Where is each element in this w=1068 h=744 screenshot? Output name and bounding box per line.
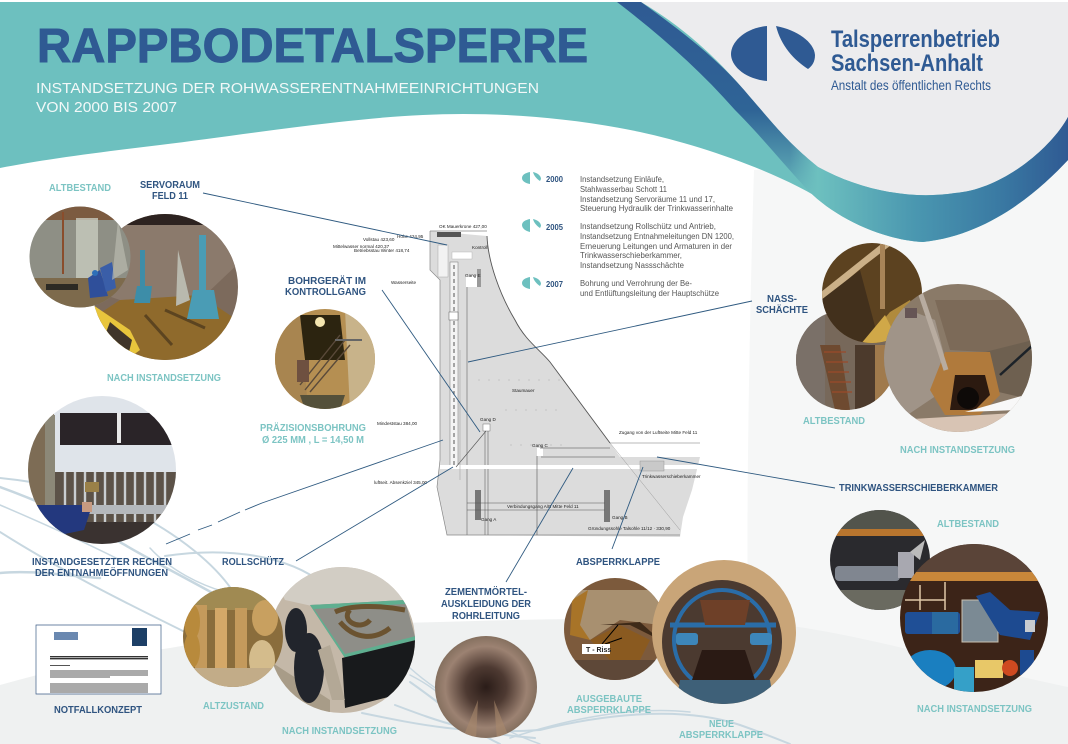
timeline 2005: Instandsetzung Rollschütz und Antrieb, bbox=[580, 222, 716, 231]
photo: Zementmörtel-Rohr bbox=[435, 636, 537, 740]
heading: Bohrgerät: BOHRGERÄT IM bbox=[288, 274, 366, 287]
timeline 2000: Steuerung Hydraulik der Trinkwasserinhalte bbox=[580, 204, 734, 213]
dam annotations: Zugang von der Luftseite Mitte Feld 11 bbox=[619, 430, 698, 435]
label: Präzisionsbohrung: PRÄZISIONSBOHRUNG bbox=[260, 421, 366, 434]
header: swoosh bbox=[617, 2, 1068, 242]
photo: neue Absperrklappe bbox=[650, 556, 798, 710]
photo: Rollschütz nach Instandsetzung bbox=[268, 564, 416, 716]
label: neue Absperrklappe: NEUE bbox=[709, 719, 734, 730]
timeline 2005: Trinkwasserschieberkammer, bbox=[580, 251, 682, 260]
label: ausgebaute Absperrklappe bbox=[567, 694, 651, 716]
logo: Anstalt des öffentlichen Rechts bbox=[831, 78, 991, 93]
dam annotations bbox=[333, 224, 701, 531]
dam annotations: Höhe 424,95 bbox=[397, 234, 424, 239]
dam annotations: Gründungssohle Talsohle 11/12 · 330,90 bbox=[588, 526, 671, 531]
heading: Nassschächte: SCHÄCHTE bbox=[756, 303, 808, 316]
label: ausgebaute Absperrklappe: ABSPERRKLAPPE bbox=[567, 705, 651, 716]
photo: Rollschütz Altzustand bbox=[182, 585, 285, 690]
label: Kammer nach Instandsetzung: NACH INSTANDSETZUNG bbox=[917, 704, 1032, 715]
photo: Nassschacht nach Instandsetzung bbox=[883, 283, 1033, 436]
dam annotations: luftseit. Absenkziel 345,00 bbox=[374, 480, 428, 485]
galleries bbox=[440, 465, 700, 469]
timeline 2007: Bohrung und Verrohrung der Be- bbox=[580, 279, 692, 288]
label: nach Instandsetzung: NACH INSTANDSETZUNG bbox=[107, 373, 221, 384]
label: Nassschächte Altbestand: ALTBESTAND bbox=[803, 416, 865, 427]
timeline 2000: 2000 bbox=[546, 174, 563, 184]
heading: Absperrklappe: ABSPERRKLAPPE bbox=[576, 557, 660, 568]
label: neue Absperrklappe bbox=[679, 719, 763, 741]
photo: ausgebaute Absperrklappe bbox=[564, 578, 658, 680]
photo: Servoraum Altbestand bbox=[29, 206, 132, 310]
heading: Bohrgerät bbox=[285, 274, 366, 298]
photo: Nassschacht Altbestand bbox=[796, 314, 890, 410]
notfallkonzept document bbox=[36, 625, 161, 694]
heading: Rechen bbox=[32, 557, 172, 579]
subtitle bbox=[36, 80, 539, 116]
photo: Rechen bbox=[27, 395, 177, 546]
dam annotations: Vollstau 423,60 bbox=[363, 237, 395, 242]
dam annotations: Wasserseite bbox=[391, 280, 417, 285]
timeline 2005: Instandsetzung Entnahmeleitungen DN 1200, bbox=[580, 232, 734, 241]
photo: Servoraum nach Instandsetzung bbox=[90, 210, 240, 365]
label: Präzisionsbohrung: Ø 225 MM , L = 14,50 M bbox=[262, 435, 364, 446]
background panels bbox=[0, 150, 1068, 744]
label: ausgebaute Absperrklappe: AUSGEBAUTE bbox=[576, 694, 642, 705]
label: nach Instandsetzung Rollschütz: NACH INSTANDSETZUNG bbox=[282, 726, 397, 737]
timeline 2000: Stahlwasserbau Schott 11 bbox=[580, 185, 668, 194]
header: teal banner bbox=[0, 2, 830, 205]
heading: Rechen: INSTANDGESETZTER RECHEN bbox=[32, 557, 172, 568]
logo: Talsperrenbetrieb bbox=[831, 26, 1000, 53]
heading: Servoraum: SERVORAUM bbox=[140, 180, 200, 191]
timeline 2000: Instandsetzung Servoräume 11 und 17, bbox=[580, 195, 715, 204]
dam cross-section bbox=[333, 224, 701, 537]
timeline bbox=[522, 172, 734, 298]
heading: Notfallkonzept: NOTFALLKONZEPT bbox=[54, 705, 142, 716]
heading: Nassschächte bbox=[756, 294, 808, 316]
T-Riss label bbox=[582, 644, 611, 654]
dam annotations: Mittelwasser normal 420,37 bbox=[333, 244, 390, 249]
timeline 2000: Instandsetzung Einläufe, bbox=[580, 175, 664, 184]
dam annotations: Gang B bbox=[612, 515, 628, 520]
timeline 2000 bbox=[522, 172, 734, 213]
timeline 2007 bbox=[522, 277, 720, 298]
dam annotations: Gang A bbox=[481, 517, 497, 522]
label: Kammer Altbestand: ALTBESTAND bbox=[937, 519, 999, 530]
heading: Zementmörtel: ZEMENTMÖRTEL- bbox=[445, 585, 527, 598]
leader lines bbox=[166, 193, 835, 582]
shafts bbox=[450, 262, 458, 467]
timeline 2005: 2005 bbox=[546, 222, 563, 232]
dam annotations: Gang D bbox=[480, 417, 497, 422]
heading: Zementmörtel: ROHRLEITUNG bbox=[452, 611, 520, 622]
heading: Zementmörtel: AUSKLEIDUNG DER bbox=[441, 599, 532, 610]
heading: Rechen: DER ENTNAHMEÖFFNUNGEN bbox=[35, 566, 168, 579]
heading: Servoraum bbox=[140, 180, 200, 202]
timeline 2005: Instandsetzung Nassschächte bbox=[580, 261, 685, 270]
title: RAPPBODETALSPERRE bbox=[37, 20, 588, 73]
label: Präzisionsbohrung bbox=[260, 421, 366, 446]
heading: Rollschütz: ROLLSCHÜTZ bbox=[222, 555, 284, 568]
dam annotations: Staumauer bbox=[512, 388, 535, 393]
heading: Nassschächte: NASS- bbox=[767, 294, 797, 305]
photo: Trinkwasserkammer nach Instandsetzung bbox=[898, 542, 1050, 695]
label: Nassschächte nach Instandsetzung: NACH INSTANDSETZUNG bbox=[900, 445, 1015, 456]
heading: Zementmörtel bbox=[441, 585, 532, 622]
label: Altbestand: ALTBESTAND bbox=[49, 183, 111, 194]
photo: Nassschacht oben bbox=[821, 242, 924, 345]
dam annotations: Trinkwasserschieberkammer bbox=[642, 474, 701, 479]
heading: Bohrgerät: KONTROLLGANG bbox=[285, 287, 366, 298]
timeline 2005 bbox=[522, 219, 734, 270]
subtitle: VON 2000 BIS 2007 bbox=[36, 99, 177, 116]
heading: Trinkwasserschieberkammer: TRINKWASSERSCHIEBERKAMMER bbox=[839, 483, 999, 494]
dam annotations: Verbindungsgang A/B Mitte Feld 11 bbox=[507, 504, 579, 509]
label: Altzustand: ALTZUSTAND bbox=[203, 701, 264, 712]
dam annotations: Kontroll bbox=[472, 245, 488, 250]
dam annotations: Betriebsstau Winter 418,74 bbox=[354, 248, 410, 253]
dam annotations: Gang E bbox=[465, 273, 481, 278]
timeline 2007: 2007 bbox=[546, 279, 563, 289]
logo bbox=[731, 26, 1000, 93]
subtitle: INSTANDSETZUNG DER ROHWASSERENTNAHMEEINRICHTUNGEN bbox=[36, 80, 539, 97]
decorative flowing lines bbox=[0, 478, 790, 744]
timeline 2005: Erneuerung Leitungen und Armaturen in der bbox=[580, 242, 732, 251]
dam annotations: Mindeststau 384,00 bbox=[377, 421, 418, 426]
photo: Bohrgerät bbox=[274, 308, 378, 412]
timeline 2007: und Entlüftungsleitung der Hauptschütze bbox=[580, 289, 720, 298]
label: neue Absperrklappe: ABSPERRKLAPPE bbox=[679, 730, 763, 741]
heading: Servoraum: FELD 11 bbox=[152, 191, 188, 202]
dam annotations: Gang C bbox=[532, 443, 549, 448]
photo: Trinkwasserkammer Altbestand bbox=[829, 509, 933, 612]
header: logo panel bbox=[641, 2, 1068, 195]
logo: Sachsen-Anhalt bbox=[831, 50, 983, 77]
dam annotations: OK Mauerkrone 427,00 bbox=[439, 224, 487, 229]
T-Riss label: T - Riss bbox=[586, 647, 611, 654]
